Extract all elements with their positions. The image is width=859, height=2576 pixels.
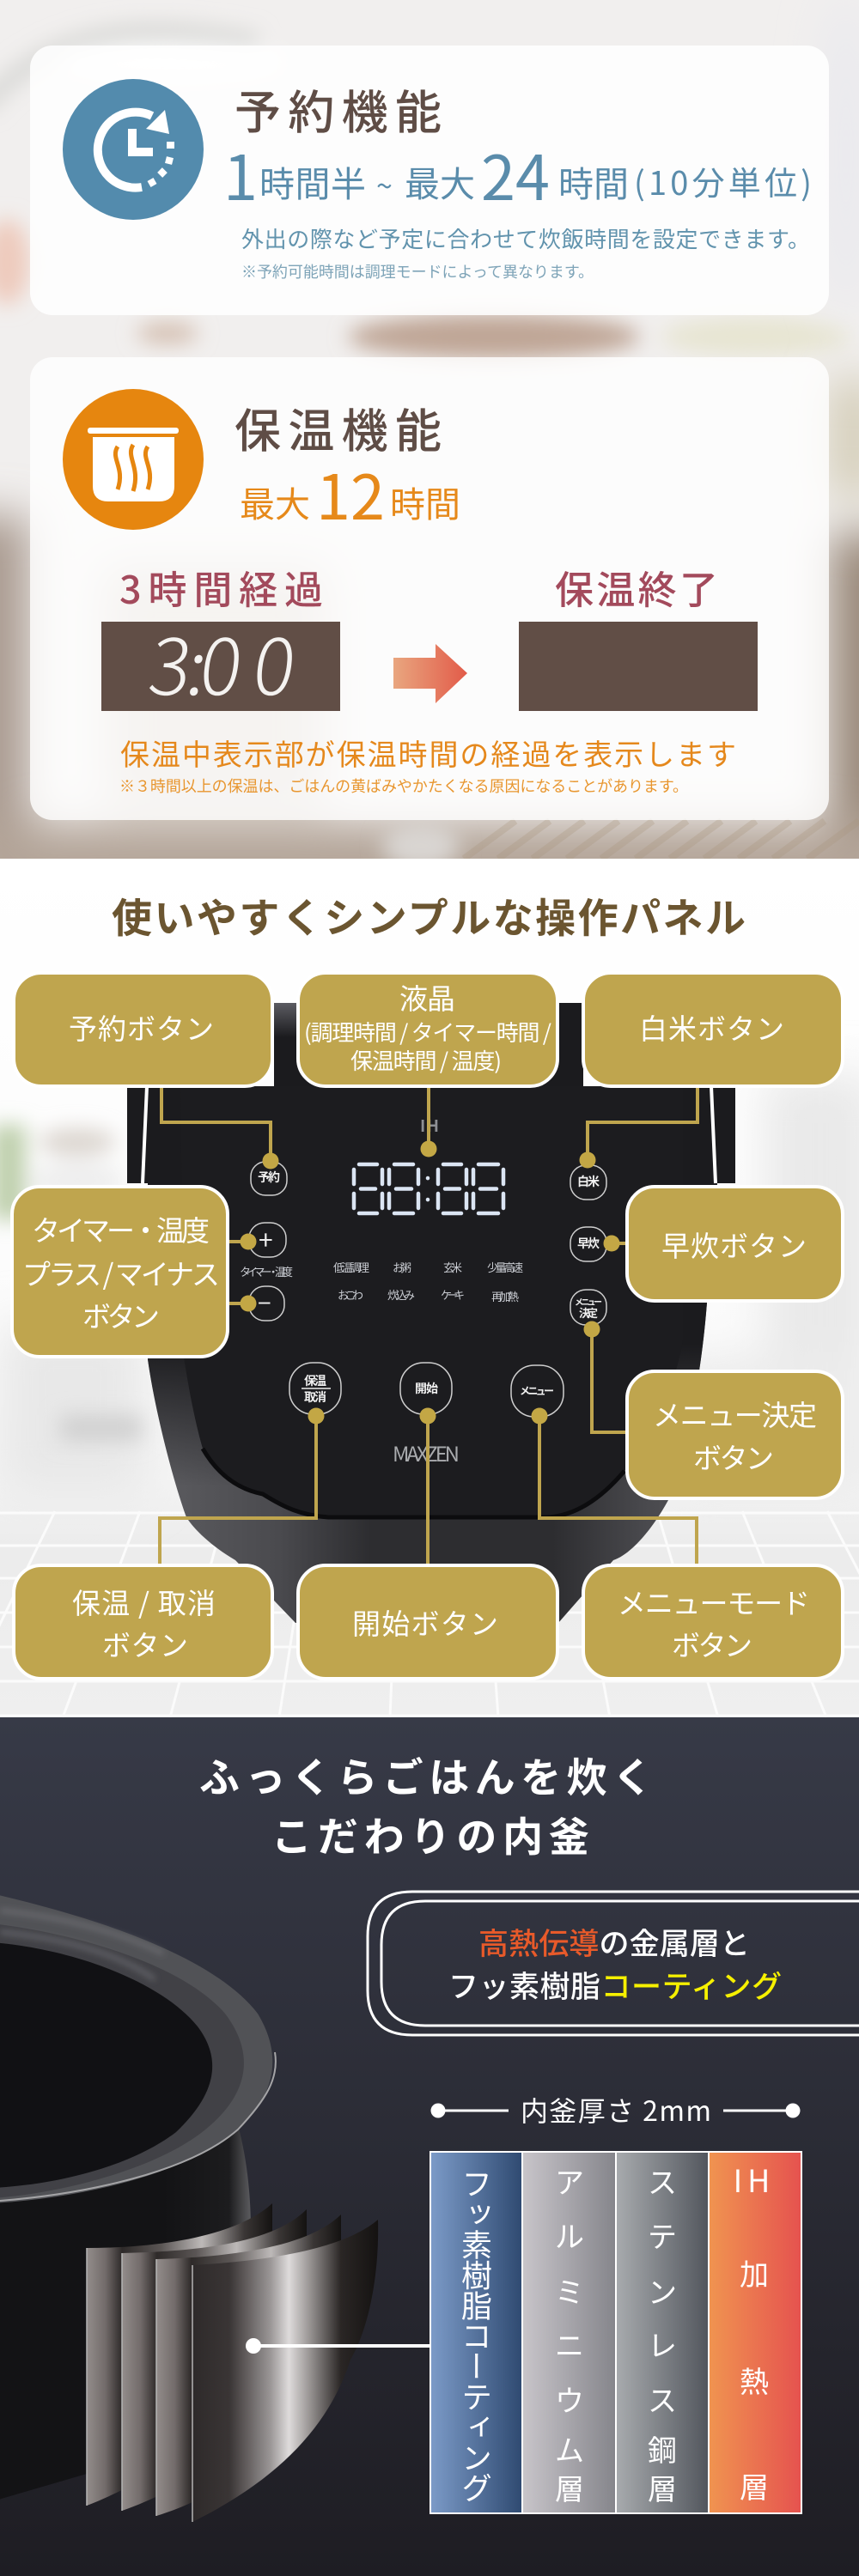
time range: (10分単位)	[634, 157, 812, 204]
thickness label	[431, 2090, 801, 2129]
callout: start button: 開始ボタン	[352, 1601, 498, 1643]
footnote: ※予約可能時間は調理モードによって異なります。	[241, 260, 594, 283]
icon: clock with arrow	[63, 79, 204, 220]
callout: timer plus minus	[12, 1187, 228, 1357]
button labels: メニュー	[575, 1295, 602, 1308]
callout: LCD	[298, 973, 557, 1086]
heading: inner pot: こだわりの内釜	[271, 1804, 589, 1863]
callout: white rice button: 白米ボタン	[639, 1006, 784, 1048]
heading: inner pot	[199, 1745, 653, 1863]
button labels: 開始	[415, 1380, 438, 1397]
layer: aluminum: ム	[555, 2427, 584, 2470]
layer: stainless steel: 鋼	[648, 2427, 677, 2470]
label: end: 保温終了	[555, 559, 718, 615]
callout: keep warm cancel button: 保温 / 取消	[72, 1581, 216, 1622]
layer: stainless steel: ス	[648, 2378, 677, 2420]
layer: aluminum: ル	[555, 2214, 584, 2256]
time range: 1	[223, 128, 258, 218]
callout: quick cook button: 早炊ボタン	[661, 1224, 807, 1265]
mode labels: ケーキ	[441, 1286, 465, 1303]
callout: LCD: (調理時間 / タイマー時間 /	[304, 1016, 551, 1048]
callout: timer plus minus: プラス / マイナス	[22, 1252, 220, 1293]
layer: stainless steel: ス	[648, 2160, 677, 2202]
button labels: 決定	[579, 1304, 598, 1321]
callout: menu mode button	[583, 1565, 843, 1679]
callout: white rice button	[583, 973, 843, 1086]
button labels	[258, 1169, 602, 1406]
label: 3 hours: 3時間経過	[119, 559, 323, 615]
layers chart	[430, 2152, 801, 2513]
callout: LCD: 液晶	[399, 976, 455, 1018]
connector lines and dots	[160, 1086, 698, 1565]
callout: quick cook button	[627, 1187, 843, 1301]
display: 3:00	[101, 606, 340, 718]
button labels: 早炊	[577, 1235, 600, 1252]
layer: fluororesin coating: フッ素樹脂コーティング	[454, 2168, 499, 2503]
callout: menu confirm button: ボタン	[693, 1436, 774, 1477]
caption: 保温中表示部が保温時間の経過を表示します	[120, 732, 736, 774]
callout: timer plus minus: タイマー・温度	[32, 1208, 210, 1249]
background photo: rice bowls	[0, 0, 859, 910]
layer: IH heating: 層	[740, 2464, 769, 2506]
panel: reservation function	[30, 46, 829, 315]
mode labels: 再加熱	[491, 1288, 519, 1304]
callout: keep warm cancel button	[14, 1565, 272, 1679]
heading: 予約機能	[235, 75, 442, 143]
layer: IH heating: 熱	[740, 2359, 769, 2401]
time range: 24	[481, 128, 550, 218]
layer: stainless steel: ン	[648, 2269, 677, 2312]
thickness label: 内釜厚さ 2mm	[521, 2090, 711, 2129]
rice cooker	[127, 1003, 735, 1623]
LED display	[354, 1164, 503, 1213]
callout: metal layer and coating: フッ素樹脂コーティング	[448, 1963, 782, 2007]
layer: IH heating: 加	[740, 2251, 769, 2293]
callout: keep warm cancel button: ボタン	[102, 1623, 188, 1664]
mode labels: 少量高速	[487, 1259, 523, 1275]
max 12 hours: 時間	[390, 476, 460, 527]
mode labels	[240, 1259, 523, 1304]
time range: 最大	[405, 155, 475, 207]
panel: keep warm function	[30, 357, 829, 820]
mode labels: お粥	[393, 1259, 411, 1275]
button labels: 取消	[304, 1388, 326, 1406]
layered sheets illustration	[87, 2203, 378, 2522]
time range	[223, 128, 812, 218]
layer: aluminum: ニ	[555, 2323, 584, 2365]
callout: menu confirm button	[627, 1371, 843, 1498]
IH label: IH	[420, 1114, 439, 1137]
callout: menu confirm button: メニュー決定	[653, 1393, 817, 1434]
callout: metal layer and coating	[368, 1892, 859, 2035]
footnote: ※３時間以上の保温は、ごはんの黄ばみやかたくなる原因になることがあります。	[119, 775, 688, 797]
callout: LCD: 保温時間 / 温度)	[350, 1044, 502, 1076]
heading: control panel: 使いやすくシンプルな操作パネル	[112, 885, 746, 945]
background: kitchen	[0, 1065, 859, 1717]
button labels: 予約	[258, 1169, 280, 1186]
inner pot illustration	[0, 1893, 276, 2500]
arrow	[393, 644, 467, 703]
layer: IH heating: IH	[734, 2157, 775, 2202]
description: 外出の際など予定に合わせて炊飯時間を設定できます。	[241, 222, 810, 254]
max 12 hours: 12	[316, 447, 385, 538]
time range: 時間半	[259, 155, 366, 207]
callout: metal layer and coating: 高熱伝導の金属層と	[478, 1920, 750, 1964]
callout: menu mode button: メニューモード	[618, 1581, 810, 1622]
mode labels: 玄米	[443, 1259, 462, 1275]
mode labels: タイマー・温度	[240, 1263, 293, 1279]
layer: stainless steel: テ	[648, 2214, 677, 2256]
callout: reservation button	[14, 973, 272, 1086]
heading: inner pot: ふっくらごはんを炊く	[199, 1745, 653, 1804]
button outlines	[249, 1162, 606, 1417]
max 12 hours	[240, 447, 460, 538]
mode labels: 低温調理	[333, 1259, 369, 1275]
callout: start button	[298, 1565, 557, 1679]
heading: 保温機能	[235, 393, 442, 461]
display: blank	[519, 622, 758, 711]
button labels: 白米	[577, 1173, 600, 1190]
button labels: メニュー	[520, 1383, 554, 1398]
layer: aluminum: ウ	[555, 2378, 584, 2420]
button labels: −	[258, 1285, 271, 1320]
layer: fluororesin coating	[430, 2152, 523, 2513]
callout: timer plus minus: ボタン	[82, 1294, 160, 1335]
time range: 時間	[558, 155, 629, 207]
layer: aluminum: 層	[555, 2466, 584, 2508]
icon: pot with steam	[63, 389, 204, 530]
mode labels: 炊込み	[387, 1286, 415, 1303]
layer: stainless steel: 層	[648, 2466, 677, 2508]
button labels: 保温	[304, 1372, 326, 1389]
layer: IH heating	[709, 2152, 801, 2513]
panel: inner pot background	[0, 1717, 859, 2576]
layer: stainless steel	[616, 2152, 709, 2513]
max 12 hours: 最大	[240, 476, 310, 527]
layer: aluminum: ミ	[555, 2269, 584, 2312]
callout: reservation button: 予約ボタン	[69, 1006, 214, 1048]
layer: aluminum: ア	[555, 2160, 584, 2202]
pointer line	[246, 2338, 430, 2354]
button labels: +	[259, 1219, 273, 1257]
layer: stainless steel: レ	[648, 2323, 677, 2365]
mode labels: おこわ	[338, 1286, 363, 1303]
callout: menu mode button: ボタン	[672, 1623, 752, 1664]
time range: ~	[376, 163, 393, 205]
layer: aluminum	[522, 2152, 616, 2513]
display: 3:00: 3:00	[143, 606, 304, 718]
brand: MAXZEN	[393, 1437, 460, 1467]
